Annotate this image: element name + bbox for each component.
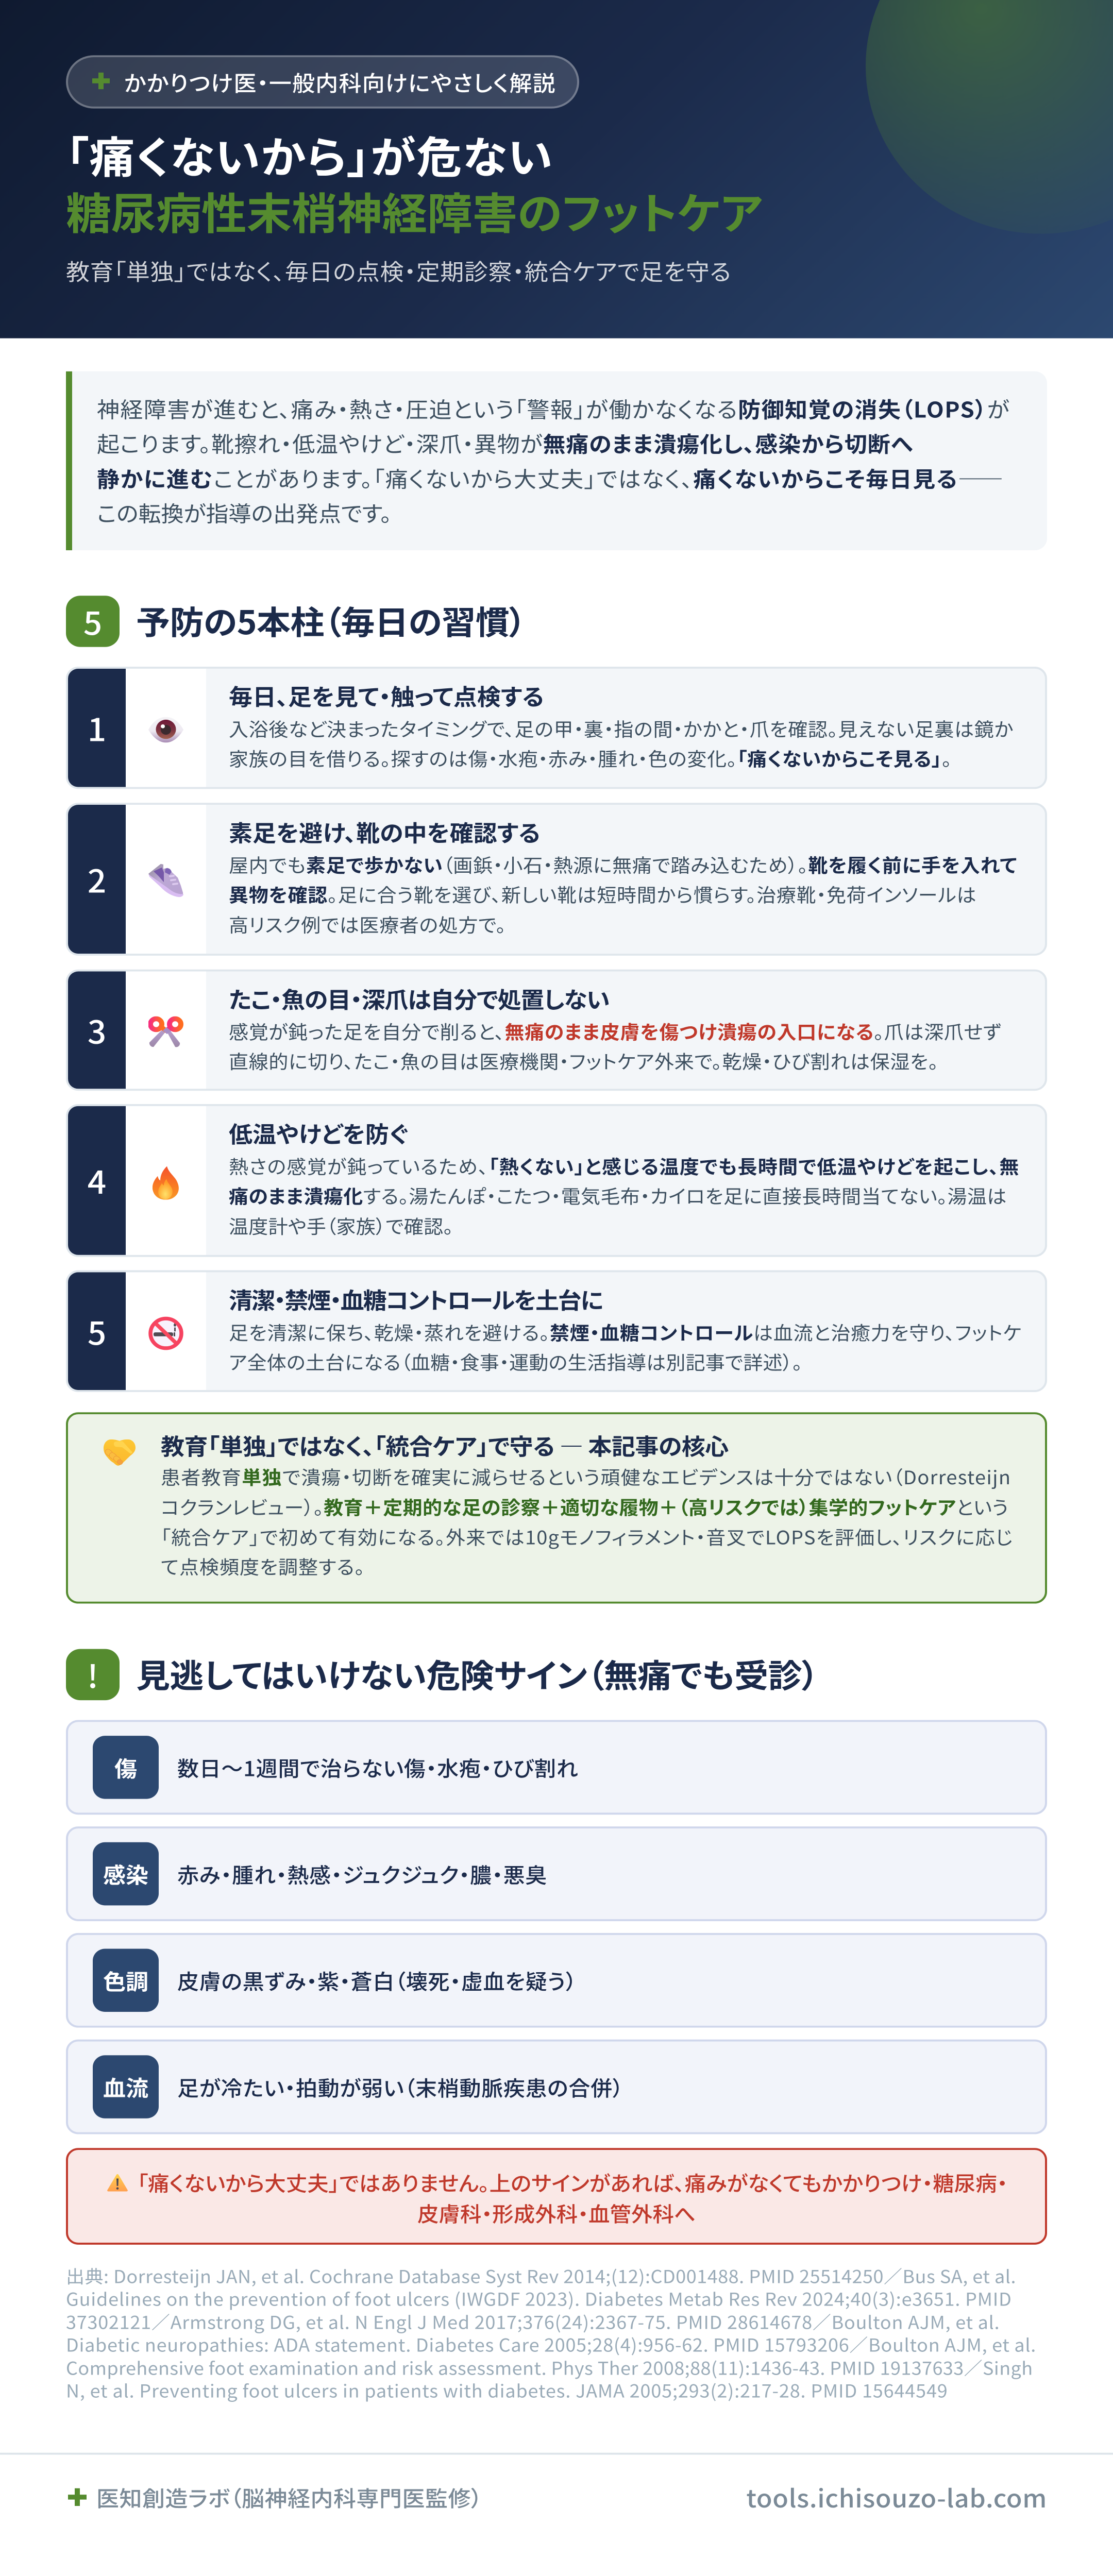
- chip: 血流: 血流: [103, 2071, 148, 2103]
- header banner: [0, 0, 1113, 338]
- pillar card 5: [66, 1270, 1047, 1392]
- lead panel: この転換が指導の出発点です。: [97, 497, 392, 528]
- sign text: 皮膚の黒ずみ・紫・蒼白（壊死・虚血を疑う）: [177, 1965, 577, 1995]
- callout text: コクランレビュー）。教育＋定期的な足の診察＋適切な履物＋（高リスクでは）集学的フットケアという: [161, 1493, 1008, 1520]
- decorative green circle: [866, 0, 1113, 234]
- pillar card 4: [66, 1104, 1047, 1257]
- pillar card 1: [66, 667, 1047, 789]
- sign text: 足が冷たい・拍動が弱い（末梢動脈疾患の合併）: [177, 2072, 623, 2102]
- icon: no smoking: [126, 1272, 206, 1390]
- sources: N, et al. Preventing foot ulcers in patients with diabetes. JAMA 2005;293(2):217-28. PMID 15644549: [66, 2377, 948, 2403]
- danger sign: blood flow: [66, 2040, 1047, 2134]
- sources: 出典: Dorresteijn JAN, et al. Cochrane Database Syst Rev 2014;(12):CD001488. PMID 25514250／Bus SA, et al.: [66, 2263, 1016, 2289]
- title: 糖尿病性末梢神経障害のフットケア: [66, 180, 762, 242]
- sources: 37302121／Armstrong DG, et al. N Engl J Med 2017;376(24):2367-75. PMID 28614678／Boulton AJM, et al.: [66, 2309, 1000, 2334]
- pillar 5 text: 清潔・禁煙・血糖コントロールを土台に: [229, 1283, 602, 1316]
- number 5: [68, 1272, 126, 1390]
- pillar 2 text: [229, 816, 1017, 938]
- icon: plus: [92, 72, 110, 90]
- footer: [0, 2453, 1113, 2522]
- warning text: 皮膚科・形成外科・血管外科へ: [417, 2198, 696, 2227]
- warning banner: [66, 2148, 1047, 2245]
- lead panel: 神経障害が進むと、痛み・熱さ・圧迫という「警報」が働かなくなる防御知覚の消失（LOPS）が: [97, 393, 1010, 424]
- icon: scissors: [126, 972, 206, 1089]
- sources: [66, 2263, 1036, 2403]
- section heading: five pillars: 予防の5本柱（毎日の習慣）: [136, 597, 526, 644]
- pillar 5 text: [229, 1283, 1022, 1375]
- pillar 5 text: ア全体の土台になる（血糖・食事・運動の生活指導は別記事で詳述）。: [229, 1348, 802, 1375]
- number 1: 1: [88, 705, 106, 751]
- pillar 2 text: 異物を確認。足に合う靴を選び、新しい靴は短時間から慣らす。治療靴・免荷インソールは: [229, 880, 976, 907]
- pillar 4 text: 温度計や手（家族）で確認。: [229, 1212, 453, 1239]
- pillar 3 text: たこ・魚の目・深爪は自分で処置しない: [229, 982, 609, 1015]
- pillar 2 text: 素足を避け、靴の中を確認する: [229, 816, 540, 848]
- core message callout: [66, 1412, 1047, 1604]
- warning text: [137, 2167, 1008, 2227]
- danger sign: infection: [66, 1826, 1047, 1921]
- sign text: 赤み・腫れ・熱感・ジュクジュク・膿・悪臭: [177, 1859, 547, 1889]
- pillar 1 text: [229, 680, 1014, 771]
- danger sign: wound: [66, 1720, 1047, 1815]
- icon: fire: [126, 1106, 206, 1255]
- chip: 傷: [93, 1736, 159, 1799]
- callout text: て点検頻度を調整する。: [161, 1552, 365, 1580]
- footer url: tools.ichisouzo-lab.com: [746, 2479, 1047, 2515]
- callout text: 患者教育単独で潰瘍・切断を確実に減らせるという頑健なエビデンスは十分ではない（Dorresteijn: [161, 1463, 1011, 1489]
- footer organisation: 医知創造ラボ（脳神経内科専門医監修）: [96, 2481, 483, 2513]
- subtitle: 教育「単独」ではなく、毎日の点検・定期診察・統合ケアで足を守る: [66, 255, 731, 287]
- pillar 3 text: 直線的に切り、たこ・魚の目は医療機関・フットケア外来で。乾燥・ひび割れは保湿を。: [229, 1047, 939, 1074]
- number 4: 4: [88, 1158, 106, 1203]
- number 3: [68, 972, 126, 1089]
- section badge: 5: [66, 596, 120, 647]
- danger sign: colour: [66, 1933, 1047, 2028]
- pillar 3 text: [229, 982, 1002, 1074]
- number 2: [68, 805, 126, 954]
- number 1: [68, 669, 126, 787]
- icon: eye: [126, 669, 206, 787]
- number 4: [68, 1106, 126, 1255]
- title: 「痛くないから」が危ない: [66, 123, 553, 186]
- lead panel: [66, 371, 1047, 550]
- pillar 2 text: 屋内でも素足で歩かない（画鋲・小石・熱源に無痛で踏み込むため）。靴を履く前に手を入れて: [229, 851, 1017, 877]
- sign text: 数日〜1週間で治らない傷・水疱・ひび割れ: [177, 1752, 578, 1783]
- audience pill: [66, 55, 579, 109]
- chip: 色調: 色調: [103, 1964, 148, 1996]
- number 2: 2: [88, 857, 106, 902]
- section badge: alert: !: [87, 1652, 98, 1697]
- chip: 血流: [93, 2055, 159, 2119]
- warning text: 「痛くないから大丈夫」ではありません。上のサインがあれば、痛みがなくてもかかりつけ・糖尿病・: [137, 2167, 1008, 2197]
- pillar 2 text: 高リスク例では医療者の処方で。: [229, 910, 506, 938]
- section heading: danger signs: 見逃してはいけない危険サイン（無痛でも受診）: [136, 1650, 819, 1697]
- icon: handshake: [104, 1439, 136, 1466]
- pillar 4 text: 痛のまま潰瘍化する。湯たんぽ・こたつ・電気毛布・カイロを足に直接長時間当てない。湯温は: [229, 1182, 1007, 1209]
- sources: Comprehensive foot examination and risk assessment. Phys Ther 2008;88(11):1436-43. PMID 19137633／Singh: [66, 2354, 1033, 2380]
- title: [66, 123, 762, 242]
- pillar 3 text: 感覚が鈍った足を自分で削ると、無痛のまま皮膚を傷つけ潰瘍の入口になる。爪は深爪せず: [229, 1017, 1002, 1044]
- number 3: 3: [88, 1007, 106, 1053]
- pillar 1 text: 家族の目を借りる。探すのは傷・水疱・赤み・腫れ・色の変化。「痛くないからこそ見る」。: [229, 744, 952, 771]
- icon: plus: [68, 2488, 87, 2506]
- pillar 1 text: 毎日、足を見て・触って点検する: [229, 680, 544, 712]
- pill text: かかりつけ医・一般内科向けにやさしく解説: [124, 66, 556, 98]
- sources: Guidelines on the prevention of foot ulcers (IWGDF 2023). Diabetes Metab Res Rev 2024;40(3):e3651. PMID: [66, 2286, 1012, 2311]
- lead panel: 起こります。靴擦れ・低温やけど・深爪・異物が無痛のまま潰瘍化し、感染から切断へ: [97, 427, 913, 459]
- chip: 傷: 傷: [114, 1752, 137, 1783]
- pillar card 3: [66, 970, 1047, 1091]
- sources: Diabetic neuropathies: ADA statement. Diabetes Care 2005;28(4):956-62. PMID 15793206／Boulton AJM, et al.: [66, 2331, 1036, 2357]
- lead panel: 静かに進むことがあります。「痛くないから大丈夫」ではなく、痛くないからこそ毎日見る——: [97, 462, 1004, 494]
- section badge: 5: 5: [83, 599, 102, 644]
- callout text: 「統合ケア」で初めて有効になる。外来では10gモノフィラメント・音叉でLOPSを評価し、リスクに応じ: [161, 1522, 1013, 1550]
- pillar 5 text: 足を清潔に保ち、乾燥・蒸れを避ける。禁煙・血糖コントロールは血流と治癒力を守り、フットケ: [229, 1318, 1022, 1345]
- pillar 4 text: 熱さの感覚が鈍っているため、「熱くない」と感じる温度でも長時間で低温やけどを起こし、無: [229, 1151, 1020, 1179]
- callout text: 教育「単独」ではなく、「統合ケア」で守る — 本記事の核心: [161, 1429, 729, 1462]
- number 5: 5: [88, 1309, 106, 1354]
- chip: 感染: [93, 1842, 159, 1905]
- chip: 感染: 感染: [103, 1858, 148, 1890]
- chip: 色調: [93, 1949, 159, 2012]
- callout text: [161, 1429, 1013, 1580]
- pillar 4 text: [229, 1117, 1020, 1239]
- pillar 1 text: 入浴後など決まったタイミングで、足の甲・裏・指の間・かかと・爪を確認。見えない足裏は鏡か: [229, 714, 1014, 741]
- section badge: alert: [66, 1649, 120, 1700]
- icon: shoe: [126, 805, 206, 954]
- pillar card 2: [66, 803, 1047, 956]
- icon: warning: [107, 2174, 128, 2192]
- pillar 4 text: 低温やけどを防ぐ: [229, 1117, 408, 1149]
